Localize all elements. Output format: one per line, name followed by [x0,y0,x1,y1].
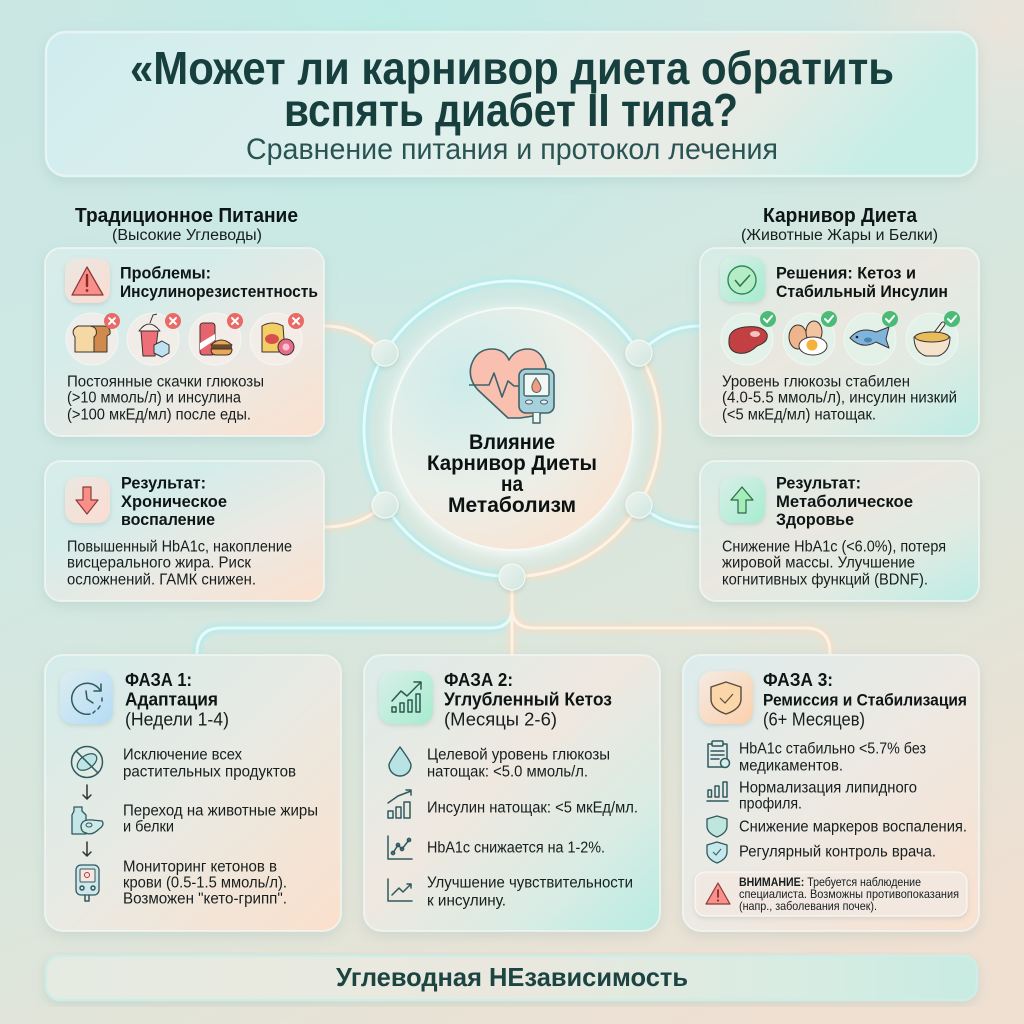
result description: когнитивных функций (BDNF). [722,572,928,588]
inflammation text: Снижение маркеров воспаления. [739,818,967,836]
solutions heading [776,264,948,301]
solutions description: (4.0-5.5 ммоль/л), инсулин низкий [722,390,957,406]
sensitivity text [427,874,633,910]
result heading: Метаболическое [776,492,913,511]
panel: solutions [700,248,979,436]
result description: Повышенный HbA1c, накопление [67,538,292,556]
icon: soda with ice [127,313,181,365]
doctor control text: Регулярный контроль врача. [739,844,936,860]
result description [722,538,946,588]
result description [67,538,292,588]
step 3 text [123,858,287,908]
step 2 text: и белки [123,818,174,836]
connector nodes [372,340,652,590]
warning text: ВНИМАНИЕ: Требуется наблюдение [739,875,921,889]
result heading: Результат: [121,474,206,492]
icon: shield [699,671,753,724]
HbA1c stable text [739,740,926,774]
lipid text [739,780,917,812]
icon: sensitivity chart [388,879,412,901]
phase 2 heading: Углубленный Кетоз [444,690,612,710]
phase 1 heading: ФАЗА 1: [125,670,192,690]
left column heading: (Высокие Углеводы) [112,227,262,244]
warning callout [695,872,967,916]
solutions heading: Решения: Кетоз и [776,264,916,282]
warning text [739,875,959,913]
arrow: step 2 to 3 [83,842,91,856]
problems heading: Проблемы: [120,264,211,282]
result description: осложнений. ГАМК снижен. [67,572,256,588]
target glucose text: натощак: <5.0 ммоль/л. [427,764,588,780]
panel: problems [45,248,324,436]
icon: glucose drop [389,747,411,776]
icon: lipid bars [707,782,728,801]
HbA1c text: HbA1c снижается на 1-2%. [427,840,605,856]
step 2 text: Переход на животные жиры [123,802,318,820]
arrow: step 1 to 2 [83,785,91,799]
HbA1c stable text: HbA1c стабильно <5.7% без [739,740,926,758]
title text: «Может ли карнивор диета обратить [130,42,894,94]
icon: insulin chart [388,790,411,818]
step 3 text: крови (0.5-1.5 ммоль/л). [123,874,287,892]
step 3 text: Возможен "кето-грипп". [123,890,287,908]
icon: down arrow [65,477,110,523]
phase 1 heading: (Недели 1-4) [125,710,229,730]
subtitle: Сравнение питания и протокол лечения [246,133,778,166]
problems description: (>100 мкЕд/мл) после еды. [67,406,251,424]
target glucose text: Целевой уровень глюкозы [427,746,610,764]
step 3 text: Мониторинг кетонов в [123,858,277,876]
footer text: Углеводная НЕзависимость [336,962,688,992]
icon: chips and candy [250,313,304,365]
insulin text: Инсулин натощак: <5 мкЕд/мл. [427,800,638,816]
panel: phase 3 [683,655,979,931]
result heading: воспаление [121,510,215,529]
icon: bread [66,313,120,365]
result description: висцерального жира. Риск [67,554,251,572]
solutions heading: Стабильный Инсулин [776,282,948,301]
phase 2 heading: (Месяцы 2-6) [444,710,557,730]
phase 3 heading: Ремиссия и Стабилизация [763,690,967,710]
icon: eggs [783,311,837,365]
icon: clipboard [708,741,730,768]
result heading: Результат: [776,474,861,492]
warning text: специалиста. Возможны противопоказания [739,887,959,901]
icon: bottle and steak [72,807,103,834]
problems description: Постоянные скачки глюкозы [67,374,264,390]
sensitivity text: к инсулину. [427,892,506,910]
icon: up arrow [720,477,765,523]
problems description [67,374,264,424]
result heading [776,474,913,529]
left column heading: Традиционное Питание [75,205,298,227]
HbA1c stable text: медикаментов. [739,758,843,774]
icon: broth bowl [906,311,960,365]
phase 1 heading [125,670,229,730]
problems description: (>10 ммоль/л) и инсулина [67,390,241,406]
left column heading [75,205,298,244]
icon: warning [65,258,110,303]
panel: carnivore result [700,461,979,601]
problems heading: Инсулинорезистентность [120,282,318,301]
result description: жировой массы. Улучшение [722,554,915,572]
title text [130,42,894,136]
central label: Метаболизм [448,494,576,517]
solutions description: Уровень глюкозы стабилен [722,374,910,390]
central label: Влияние [469,431,555,454]
panel: traditional result [45,461,324,601]
phase 3 heading: ФАЗА 3: [763,670,833,690]
icon: growth chart [379,671,433,724]
connector network [197,281,830,655]
step 1 text [123,746,296,780]
icon: shield inflammation [707,816,727,837]
phase 3 heading [763,670,967,730]
icon: shield check [707,842,727,863]
icon: can and burger [189,313,243,365]
lipid text: профиля. [739,796,802,812]
icon: check [720,257,765,302]
icon: heart and glucose meter [469,349,554,423]
phase 1 heading: Адаптация [125,690,218,710]
icon: no plants [72,746,102,778]
central circle [391,308,633,550]
icon: fish [844,311,898,365]
solutions description: (<5 мкЕд/мл) натощак. [722,406,876,424]
right column heading [741,205,938,244]
result heading: Хроническое [121,492,227,511]
icon: clock [60,671,113,724]
icon: ketone meter [76,865,99,901]
phase 2 heading: ФАЗА 2: [444,670,513,690]
icon: HbA1c chart [388,836,412,859]
right column heading: Карнивор Диета [763,205,918,227]
problems heading [120,264,318,301]
footer banner [46,956,977,1000]
result heading: Здоровье [776,510,854,529]
icon: warning triangle [706,883,730,904]
right column heading: (Животные Жары и Белки) [741,227,938,244]
central label: на [501,473,523,496]
result description: Снижение HbA1c (<6.0%), потеря [722,538,946,556]
warning text: (напр., заболевания почек). [739,899,877,913]
solutions description [722,374,957,424]
title text: вспять диабет II типа? [284,84,738,136]
step 1 text: Исключение всех [123,746,242,764]
result heading [121,474,227,529]
lipid text: Нормализация липидного [739,780,917,796]
title banner [46,32,977,176]
phase 2 heading [444,670,612,730]
central label [427,431,597,517]
step 2 text [123,802,318,836]
phase 3 heading: (6+ Месяцев) [763,710,865,730]
panel: phase 1 [45,655,341,931]
panel: phase 2 [364,655,660,931]
central label: Карнивор Диеты [427,452,597,475]
step 1 text: растительных продуктов [123,764,296,780]
icon: steak [721,311,776,365]
target glucose text [427,746,610,780]
sensitivity text: Улучшение чувствительности [427,874,633,892]
